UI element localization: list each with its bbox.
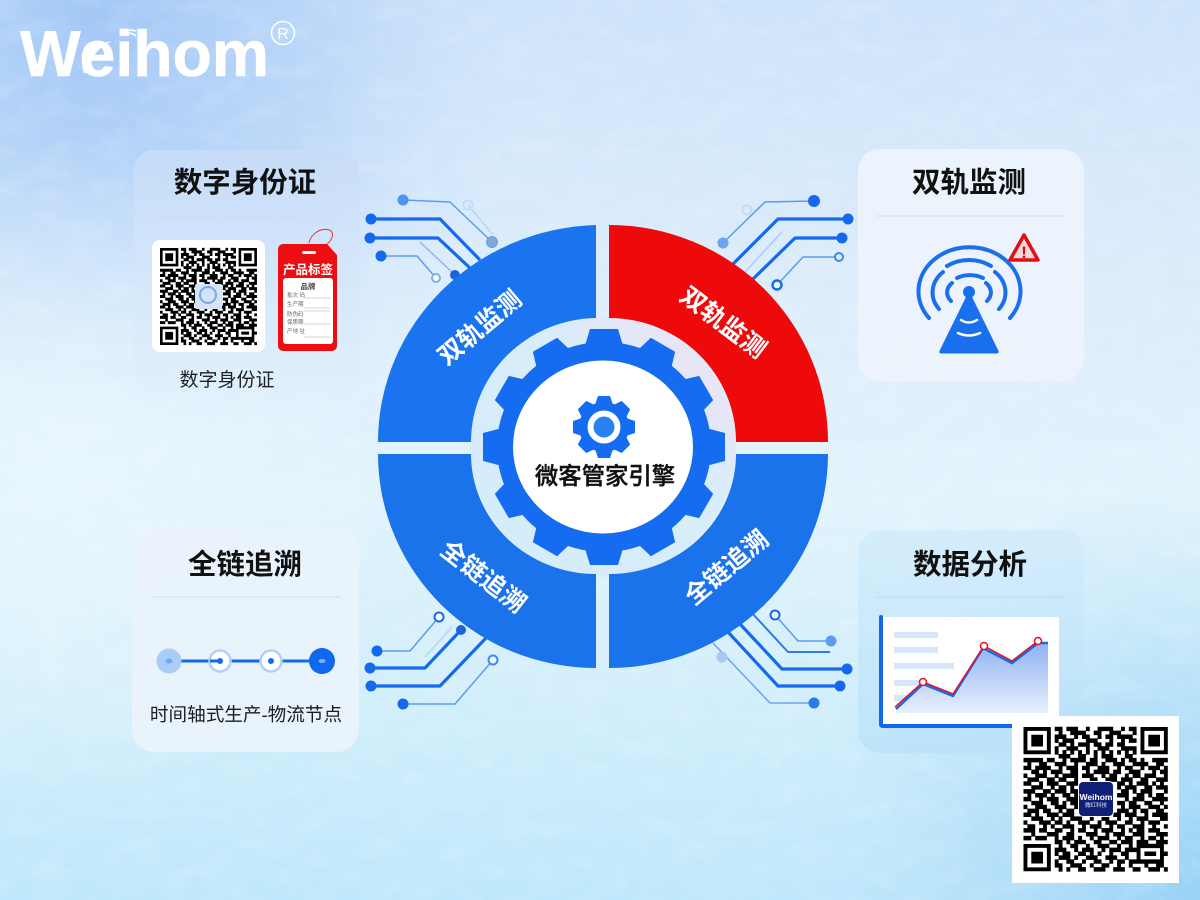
circuit lines: top right [718,195,854,290]
engine name: 微客管家引擎 [535,463,675,489]
QR logo: Weihom [1080,792,1113,802]
product tag: 防伪码 [287,310,304,318]
product tag: 产品标签 [283,262,333,277]
panel: full-chain traceability [132,530,359,752]
timeline [156,648,335,674]
icon: small gear [573,396,635,458]
segment: top right (red) [609,225,828,442]
product tag [278,229,337,351]
panel: dual-track monitoring [858,149,1084,381]
logo: Weihom: R [277,26,289,43]
product tag: 产地 址 [287,327,306,335]
label: top right: 双轨监测 [675,282,771,364]
QR logo: 微红科技 [1085,801,1107,809]
label: bottom left: 全链追溯 [435,535,531,619]
QR code: bottom right [1012,716,1179,883]
area chart [880,617,1059,727]
logo: Weihom: Weihom [20,17,269,90]
icon: red alert: ! [1021,243,1027,262]
heading: 双轨监测 [912,167,1026,199]
icon: signal tower [918,247,1020,353]
heading: 全链追溯 [188,549,302,581]
segment: bottom left [378,454,596,668]
heading: 数字身份证 [174,167,316,199]
segment: bottom right [609,454,828,668]
circuit lines: bottom right [713,610,852,708]
product tag: 生产期 [287,300,304,308]
QR logo [1078,781,1114,817]
circuit lines: bottom left [364,612,498,710]
engine ring [378,225,828,668]
caption: 数字身份证 [179,369,275,391]
product tag: 保质期 [287,318,304,326]
segment: top left [378,225,596,442]
gear hub [483,329,725,565]
QR code [152,240,265,352]
panel: digital identity [134,150,359,392]
caption: 时间轴式生产-物流节点 [150,704,342,725]
panel: data analysis [858,530,1084,753]
label: top left: 双轨监测 [433,285,527,371]
heading: 数据分析 [913,549,1027,581]
icon: red alert [1010,235,1038,262]
product tag: 批次 码 [287,291,306,299]
label: bottom right: 全链追溯 [680,525,774,611]
circuit lines: top left [364,194,498,282]
product tag: 品牌 [300,281,316,291]
